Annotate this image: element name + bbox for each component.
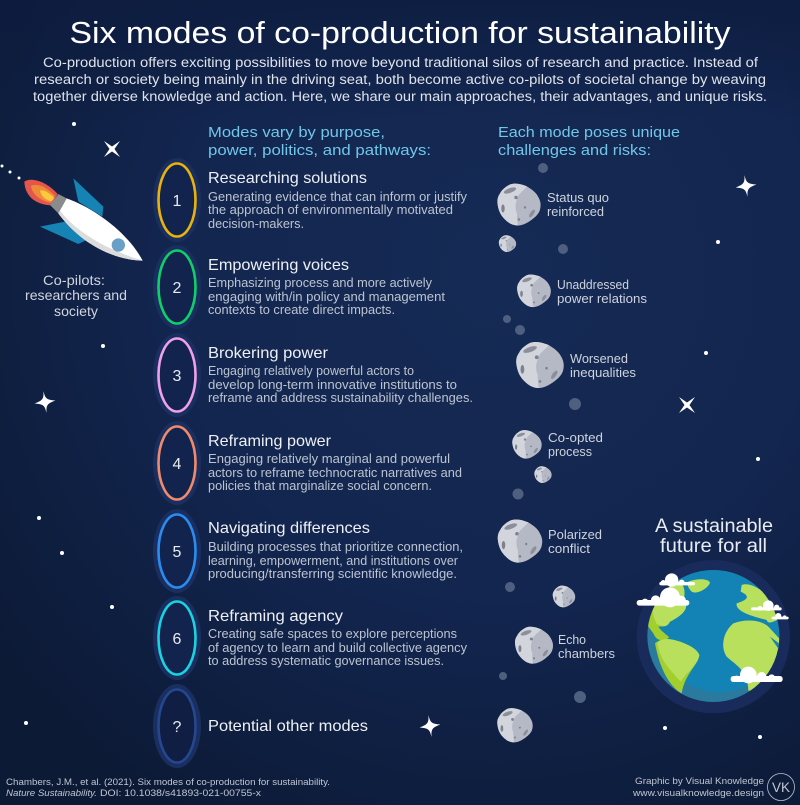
potential other modes: ? [173,719,182,736]
citation: Nature Sustainability. [6,788,97,799]
mode 3: Brokering power [208,345,329,362]
intro paragraph: research or society being mainly in the driving seat, both become active co-pilots of societal change by weaving [34,72,766,87]
heading: risks: challenges and risks: [498,142,651,159]
intro paragraph [33,55,767,104]
mode 6 [153,596,468,680]
credit: Graphic by Visual Knowledge [635,776,764,787]
mode 3: reframe and address sustainability challenges. [208,391,473,405]
title: Six modes of co-production for sustainability [70,15,731,50]
risk labels: reinforced [547,205,604,219]
mode 4: policies that marginalize social concern. [208,479,432,493]
label: sustainable future [655,516,773,557]
mode 3 [153,333,473,417]
credit: www.visualknowledge.design [632,788,764,799]
mode 5: Navigating differences [208,520,370,537]
risk labels: Unaddressed [557,278,629,292]
risk labels: chambers [558,647,615,661]
asteroid field [497,163,586,742]
star field [0,122,762,739]
intro paragraph: Co-production offers exciting possibilities to move beyond traditional silos of research and practice. Instead of [43,55,758,70]
mode 5: producing/transferring scientific knowledge. [208,567,457,581]
mode 2: contexts to create direct impacts. [208,303,395,317]
mode 5: Building processes that prioritize connection, [208,540,463,554]
mode 2 [153,245,446,329]
mode 5: 5 [173,544,182,561]
logo: VK: VK [772,779,791,795]
mode 1: 1 [173,193,182,210]
citation [6,777,330,799]
risk labels: inequalities [570,366,636,380]
mode 4: actors to reframe technocratic narratives and [208,466,462,480]
heading: risks [498,124,680,159]
mode 4: Engaging relatively marginal and powerful [208,452,450,466]
mode 4 [153,421,462,505]
potential other modes [153,684,368,768]
risk labels [547,191,647,661]
mode 1: the approach of environmentally motivated [208,203,453,217]
mode 2: engaging with/in policy and management [208,290,446,304]
risk labels: Status quo [547,191,609,205]
label: co-pilots: Co-pilots: [43,272,105,288]
credit [632,776,764,799]
potential other modes: Potential other modes [208,718,368,735]
intro paragraph: together diverse knowledge and action. Here, we share our main approaches, their advantages, and unique risks. [33,89,767,104]
mode 2: Empowering voices [208,257,349,274]
mode 1: decision-makers. [208,217,304,231]
mode 3: Engaging relatively powerful actors to [208,364,414,378]
heading: modes [208,124,431,159]
icon: rocket [24,178,143,261]
risk labels: power relations [557,292,647,306]
mode 6: of agency to learn and build collective agency [208,641,468,655]
risk labels: Worsened [570,352,628,366]
risk labels: Echo [558,633,586,647]
mode 6: Creating safe spaces to explore perceptions [208,627,457,641]
logo: VK [768,774,794,800]
mode 6: 6 [173,631,182,648]
risk labels: conflict [548,542,591,556]
mode 3: develop long-term innovative institutions to [208,378,457,392]
mode 1 [153,158,468,242]
label: sustainable future: future for all [660,536,767,557]
label: co-pilots [25,272,127,319]
risk labels: Polarized [548,528,602,542]
mode 4: Reframing power [208,433,332,450]
mode 1: Researching solutions [208,170,367,187]
mode 5 [153,509,463,593]
mode 3: 3 [173,368,182,385]
label: co-pilots: society [54,303,98,319]
risk labels: Co-opted [548,431,603,445]
mode 4: 4 [173,456,182,473]
mode 1: Generating evidence that can inform or justify [208,190,468,204]
citation: Chambers, J.M., et al. (2021). Six modes of co-production for sustainability. [6,777,330,788]
label: sustainable future: A sustainable [655,516,773,537]
icon: earth [637,560,790,713]
mode 6: to address systematic governance issues. [208,654,444,668]
label: co-pilots: researchers and [25,287,127,303]
risk labels: process [548,445,592,459]
heading: modes: power, politics, and pathways: [208,142,431,159]
mode 6: Reframing agency [208,608,343,625]
mode 5: learning, empowerment, and institutions over [208,554,458,568]
mode 2: 2 [173,280,182,297]
citation: DOI: 10.1038/s41893-021-00755-x [100,788,261,799]
heading: risks: Each mode poses unique [498,124,680,141]
mode 2: Emphasizing process and more actively [208,276,433,290]
heading: modes: Modes vary by purpose, [208,124,385,141]
